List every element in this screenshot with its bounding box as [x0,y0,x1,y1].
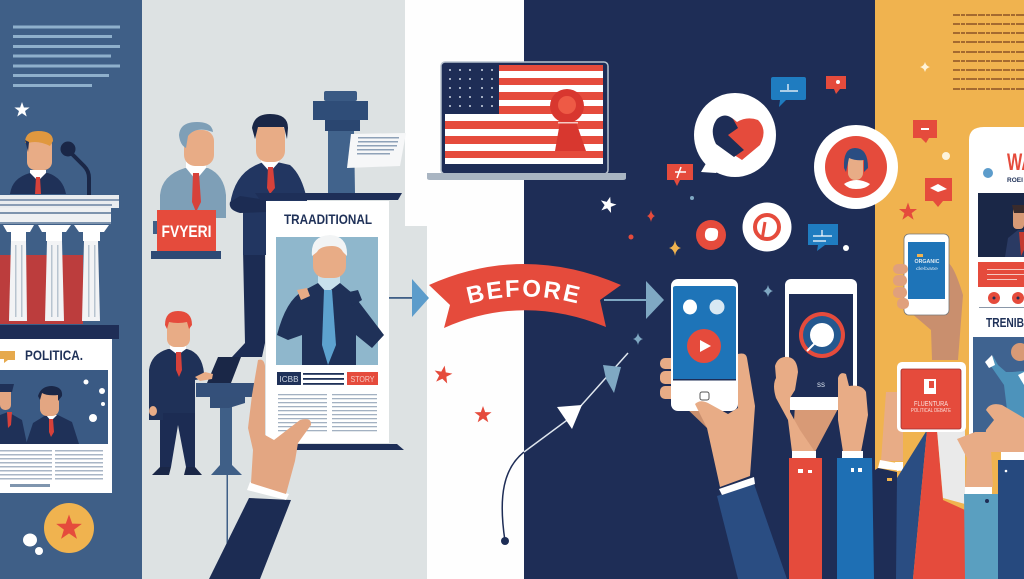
slab above newspaper [255,193,402,200]
sparkle on amber [920,62,930,72]
tag: ICBB: ICBB [280,375,298,384]
icon: red circle [696,220,726,250]
red sleeve [789,458,822,579]
label: phone screen text: ORGANIC [914,259,940,265]
icon: small white bubbles [23,534,43,555]
sign: FVYERI: FVYERI [162,222,212,241]
tag: STORY [347,372,378,385]
background: light grey column [142,0,427,579]
phone 2: ss [817,380,825,389]
text columns [0,450,103,487]
icon: red stars [433,364,492,422]
palm under phone 2 [792,405,840,452]
laptop with US flag [427,62,626,180]
icon: profile bubble [814,125,898,209]
app photo: crowd [973,337,1024,452]
slab below newspaper [267,444,404,450]
red phone: POLITICAL DEBATE [911,408,952,414]
icon: gold emblem [0,351,15,363]
icon: white star [14,102,30,116]
photo: man in suit [276,235,384,365]
newspaper: political front page [0,339,112,493]
text block: amber panel small text [953,15,1024,89]
arrow: newspaper to banner [389,279,429,317]
icon: red chat left [667,164,693,186]
illustration: tall podium [313,91,368,193]
arrow: banner to phones [604,281,664,319]
red phone [897,362,966,432]
background: white column [405,0,524,579]
banner: BEFORE [429,264,621,328]
hand gripping phone 1 [695,354,755,487]
right thumb and wrist [838,373,868,452]
label: phone headline: FLUENTURA [914,401,948,408]
speaker at podium [10,131,66,194]
icon: red chat amber 1 [913,120,937,143]
background: amber column [875,0,1024,579]
hand and teal sleeve [957,432,993,487]
figure: small red-haired man with desk [149,311,255,550]
decorative sparkles on navy [598,195,849,345]
tag: ICBB [277,372,301,385]
icon: blue chat top [771,77,806,107]
heading: POLITICA: POLITICA. [25,348,83,363]
left fingers [774,357,815,452]
phone 2 [785,279,857,410]
photo: two politicians [0,370,108,444]
background: navy column [524,0,875,579]
text block: top-left text lines [13,26,120,87]
figure: grey-suited man [160,122,226,218]
app buttons [979,292,1024,308]
cuffs [792,451,863,458]
icon: microphone [60,142,100,215]
heading: TRAADITIONAL: TRAADITIONAL [284,211,372,227]
icon: blue chat lower [808,224,838,251]
newspaper: TRADITIONAL front page [266,201,389,443]
hands and phone 1 [660,279,787,579]
sign: FVYERI [151,210,221,259]
label: ROEI: ROEI [1007,177,1023,184]
cuff 1 [719,477,755,495]
icon: red ribbon rosette [550,89,586,151]
icon: pinterest-style bubble [742,202,792,252]
icon: red chat top [826,76,846,94]
small phone held in hand [893,234,963,360]
palm shadow under phone 1 [683,405,712,428]
navy sleeve right [1001,452,1024,460]
tall smartphone: news app [969,127,1024,452]
app red bar [978,262,1024,287]
sleeve 1 [717,484,787,579]
white dot [942,152,950,160]
tag: STORY: STORY [350,375,375,384]
banner: BEFORE: BEFORE [466,280,580,304]
phone 1 [671,279,738,411]
headline rules [303,373,344,385]
icon: gold star badge [44,503,94,553]
small phone held in hand: debate [916,266,939,271]
hand holding newspaper [209,360,311,579]
hands and phone 2 [774,279,874,579]
blue sleeve [837,458,874,579]
note card [347,133,406,168]
illustration: capitol building [0,195,119,339]
hands and phones bottom-right group [875,362,1024,579]
curved arrow [501,353,628,545]
icon: heart speech bubble [694,93,776,177]
background: slate blue column [0,0,142,579]
icon: red star amber [899,202,917,220]
figure: navy-suited man [230,114,307,357]
icon: red chat amber 2 [925,178,952,207]
article text columns [278,394,377,431]
app photo: speaker [978,193,1024,257]
